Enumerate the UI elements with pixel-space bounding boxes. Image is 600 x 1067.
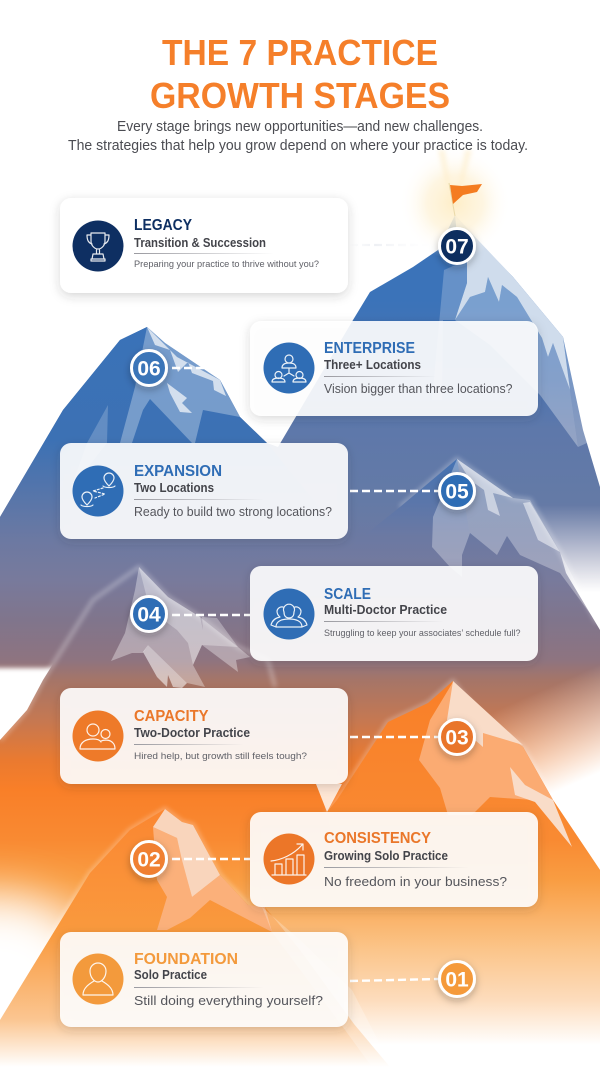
fog: right of stage 3: [453, 660, 600, 870]
card: expansion: EXPANSION: [134, 463, 222, 480]
card: enterprise: [250, 321, 538, 416]
back mountain body: [0, 215, 600, 1067]
icon: growth chart: [264, 834, 314, 884]
card: foundation: Solo Practice: [134, 968, 207, 982]
subtitle: [68, 119, 528, 154]
card: expansion: Ready to build two strong locations?: [134, 505, 332, 519]
badge: 02: [132, 842, 166, 876]
icon: trophy: [72, 220, 124, 272]
card: foundation: [60, 932, 348, 1027]
mountain 05: [365, 459, 597, 623]
icon: team hierarchy: [264, 342, 314, 394]
card: enterprise: Vision bigger than three locations?: [324, 382, 513, 396]
card: capacity: CAPACITY: [134, 708, 209, 725]
icon: single person: [72, 954, 124, 1004]
title: GROWTH STAGES: [150, 75, 450, 116]
badge: 06: 06: [137, 358, 161, 380]
badge: 07: [440, 228, 474, 264]
mountain 07 facets: [432, 215, 587, 447]
card: foundation: FOUNDATION: [134, 951, 238, 968]
card: consistency: CONSISTENCY: [324, 830, 431, 847]
fog: right of stage 5: [530, 480, 600, 630]
subtitle: The strategies that help you grow depend on where your practice is today.: [68, 138, 528, 154]
card: legacy: Preparing your practice to thrive without you?: [134, 259, 319, 270]
mountain 04: [0, 567, 275, 740]
mountain 02: [0, 809, 392, 1067]
icon: three people: [264, 588, 314, 640]
mountain 06: [0, 327, 345, 539]
badge: 04: 04: [137, 604, 161, 626]
badge: 06: [132, 350, 166, 386]
card: expansion: [60, 443, 348, 539]
card: legacy: Transition & Succession: [134, 236, 266, 250]
card: enterprise: ENTERPRISE: [324, 340, 415, 357]
flag on the summit: [449, 183, 482, 216]
card: scale: [250, 566, 538, 661]
badge: 03: 03: [445, 726, 469, 750]
badge: 04: [132, 596, 166, 632]
card: consistency: Growing Solo Practice: [324, 849, 448, 863]
valley between mountains: [316, 784, 342, 812]
card: scale: Multi-Doctor Practice: [324, 603, 447, 617]
icon: two people: [72, 710, 124, 762]
title: THE 7 PRACTICE: [162, 32, 438, 73]
card: scale: Struggling to keep your associates’ schedule full?: [324, 628, 520, 639]
connector dashes: [172, 245, 438, 981]
fog: left gap: [0, 664, 52, 740]
subtitle: Every stage brings new opportunities—and new challenges.: [117, 119, 483, 135]
icon: map route: [72, 466, 124, 516]
card: capacity: [60, 688, 348, 784]
badge: 01: 01: [445, 968, 469, 992]
card: capacity: Hired help, but growth still feels tough?: [134, 751, 307, 762]
sun glow behind flag: [399, 147, 511, 259]
card: expansion: Two Locations: [134, 481, 214, 495]
card: consistency: [250, 812, 538, 907]
mountain 03: [327, 681, 600, 880]
badge: 05: [440, 474, 474, 508]
badge: 07: 07: [445, 236, 469, 258]
card: capacity: Two-Doctor Practice: [134, 726, 250, 740]
card: scale: SCALE: [324, 586, 371, 603]
badge: 03: [440, 720, 474, 754]
badge: 05: 05: [445, 480, 469, 504]
card: enterprise: Three+ Locations: [324, 358, 421, 372]
badge: 02: 02: [137, 848, 161, 872]
badge: 01: [440, 962, 474, 996]
card: foundation: Still doing everything yourself?: [134, 994, 323, 1008]
card: legacy: [60, 198, 348, 293]
card: consistency: No freedom in your business?: [324, 875, 507, 889]
fog: lower left: [0, 858, 80, 1020]
card: legacy: LEGACY: [134, 217, 192, 234]
title: [150, 32, 450, 116]
